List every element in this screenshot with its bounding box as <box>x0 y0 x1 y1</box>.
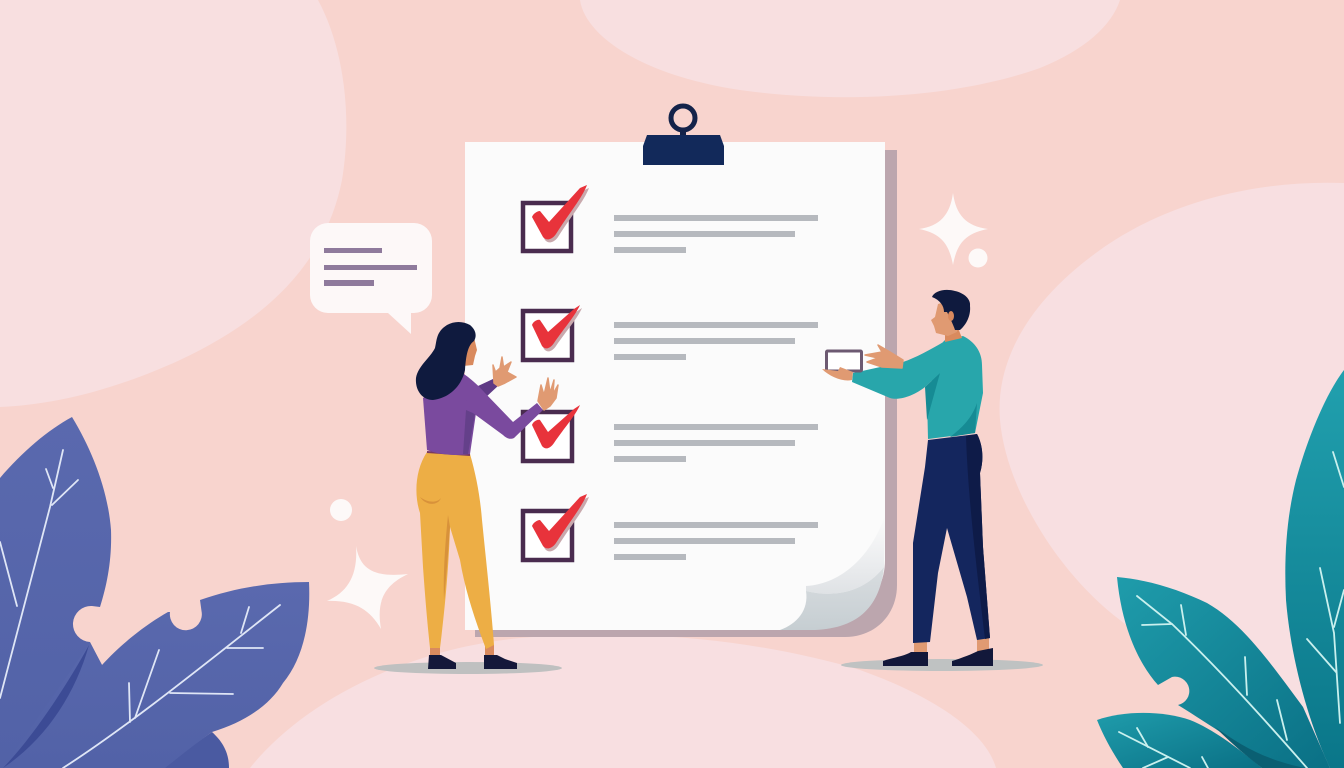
ground shadow: woman <box>374 662 562 674</box>
checklist row 4 <box>523 494 818 560</box>
man face <box>931 302 957 336</box>
leaf: tall teal <box>1285 370 1344 768</box>
woman near hand <box>538 378 558 410</box>
checklist row 1 <box>523 185 818 253</box>
man shoes <box>883 648 993 666</box>
man arm <box>852 341 946 399</box>
woman torso <box>423 372 476 455</box>
man figure <box>822 290 993 666</box>
leaf: tall blue <box>0 417 111 768</box>
woman shoes <box>428 655 517 669</box>
ground shadow: man <box>841 659 1043 671</box>
left leaves <box>0 417 309 768</box>
dot: upper right <box>968 248 988 268</box>
man upper hand <box>865 345 903 368</box>
clipboard <box>465 106 897 637</box>
leaf: middle teal <box>1117 577 1330 768</box>
woman far arm <box>478 379 499 398</box>
man tablet <box>826 351 862 371</box>
woman hair <box>416 322 476 400</box>
leaf crease <box>1215 727 1305 768</box>
woman shirt shading <box>463 410 475 454</box>
checklist row 3 <box>523 405 818 462</box>
background blob: bottom <box>250 635 996 768</box>
man ankles <box>914 638 989 655</box>
leaf: bottom teal <box>1097 713 1262 768</box>
woman far hand <box>493 357 516 386</box>
man trousers <box>913 434 990 643</box>
man ear <box>948 311 954 321</box>
page curl <box>780 515 885 630</box>
bubble text lines <box>324 248 417 286</box>
leaf: lower lobe <box>160 732 229 768</box>
man hair <box>932 290 970 330</box>
sparkle: upper right <box>919 193 988 265</box>
man trousers shading <box>966 434 990 639</box>
leaf: wide blue <box>3 582 309 768</box>
woman figure <box>416 322 558 669</box>
paper shadow <box>475 150 897 637</box>
woman waistband <box>427 452 470 455</box>
woman ankles <box>430 645 494 658</box>
woman face <box>455 332 477 380</box>
paper sheet <box>465 142 885 630</box>
woman trousers <box>416 452 494 649</box>
speech bubble <box>310 223 432 334</box>
man neck <box>945 328 962 342</box>
clip block <box>643 135 724 165</box>
leaf veins <box>1119 452 1344 768</box>
man torso <box>927 336 983 439</box>
checklist row 2 <box>523 305 818 360</box>
man shirt shading <box>925 373 977 437</box>
right leaves <box>1097 370 1344 768</box>
man lower hand <box>822 367 853 380</box>
background blob: top left <box>0 0 346 407</box>
woman trousers shading <box>420 497 450 600</box>
leaf crease <box>3 645 89 768</box>
clip stem <box>680 129 686 137</box>
dot: lower left <box>330 499 352 521</box>
leaf veins <box>0 450 280 768</box>
background blob: top centre <box>580 0 1120 97</box>
woman near arm <box>461 372 543 439</box>
background blob: right <box>1000 183 1344 768</box>
sparkle: lower left <box>327 546 408 629</box>
clip ring <box>671 106 695 130</box>
